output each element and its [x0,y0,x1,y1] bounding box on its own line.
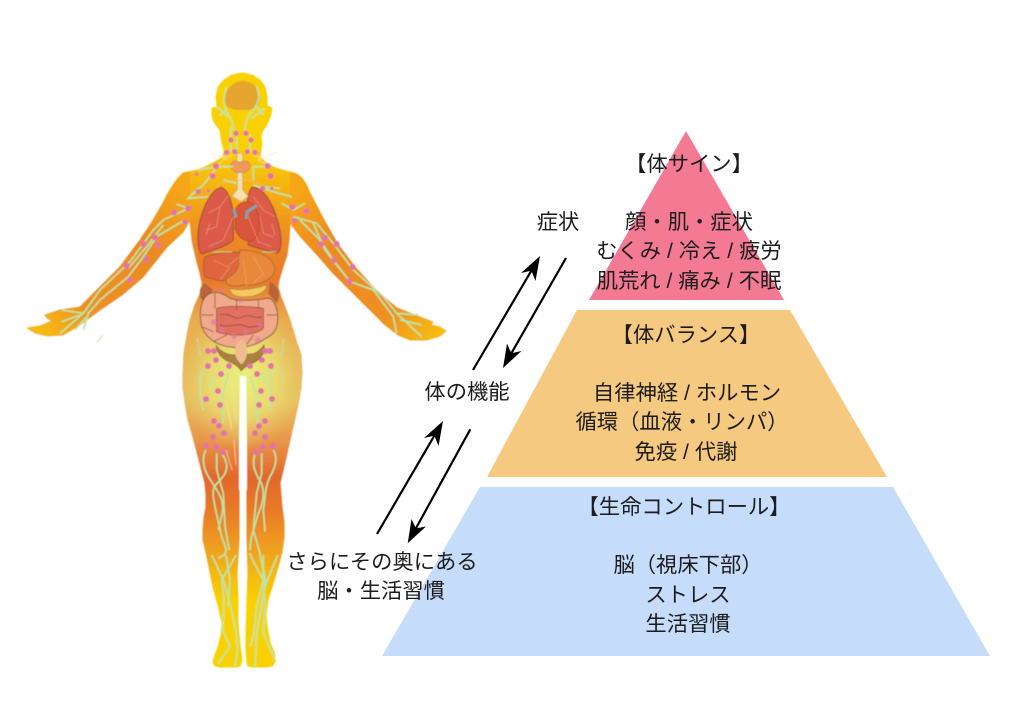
intestine folds [202,293,277,347]
text: symptoms: 顔・肌・症状 [625,210,753,234]
text: balance items: 免疫 / 代謝 [635,440,737,464]
leg gap [239,376,247,490]
lymph vessels: head and arms [60,87,422,337]
lymph vessels: legs [200,367,278,667]
stomach [226,250,275,286]
text: balance items: 循環（血液・リンパ） [576,410,788,434]
left arm shading [27,172,190,336]
text: brain and lifestyle [613,553,763,636]
heading: life control: 【生命コントロール】 [578,495,790,519]
blue tier [382,487,990,656]
organs [198,153,281,348]
pale neck and thigh nerves [211,152,277,470]
kidneys [200,282,279,303]
label: symptoms: 症状 [537,210,579,234]
text: symptoms [596,210,782,293]
trachea [232,153,248,202]
orange tier [487,310,887,477]
label: deeper causes: さらにその奥にある [286,550,478,574]
bladder [235,340,247,364]
human body figure [27,73,446,667]
large intestine [200,292,278,348]
right arm shading [290,172,446,340]
text: brain and lifestyle: ストレス [645,583,731,607]
pancreas [230,285,267,297]
lymph nodes [124,131,356,455]
right lung [247,187,281,253]
hips glow [191,330,295,444]
heart [235,202,259,241]
thyroid [231,161,250,173]
label: deeper causes [286,550,478,603]
small stray mark [97,335,103,342]
text: brain and lifestyle: 脳（視床下部） [613,553,763,577]
brain [225,81,260,110]
pink tier [589,131,784,300]
text: balance items: 自律神経 / ホルモン [593,381,781,405]
text: symptoms: むくみ / 冷え / 疲労 [596,239,782,263]
arrow: functions to brain (down) [408,429,470,543]
text: balance items [576,381,788,464]
label: deeper causes: 脳・生活習慣 [317,579,445,603]
pyramid: life control [382,487,990,656]
arrow: symptoms to functions (up) [473,256,540,370]
pyramid: body signs [589,131,784,300]
pyramid: body balance [487,310,887,477]
label: body functions: 体の機能 [424,380,510,404]
pelvis [216,345,264,371]
liver [203,252,244,281]
arrow: functions to brain (up) [377,421,443,534]
arrow: symptoms to functions (down) [503,258,566,368]
text: symptoms: 肌荒れ / 痛み / 不眠 [597,269,781,293]
heading: body balance: 【体バランス】 [612,323,760,347]
lymph vessels: abdomen [197,252,284,382]
vessels [234,206,257,219]
left lung [198,187,233,254]
body silhouette [27,73,446,667]
pale nerves on chest [206,180,275,287]
text: brain and lifestyle: 生活習慣 [645,612,731,636]
small intestine [217,306,263,335]
heading: body signs: 【体サイン】 [625,152,753,176]
